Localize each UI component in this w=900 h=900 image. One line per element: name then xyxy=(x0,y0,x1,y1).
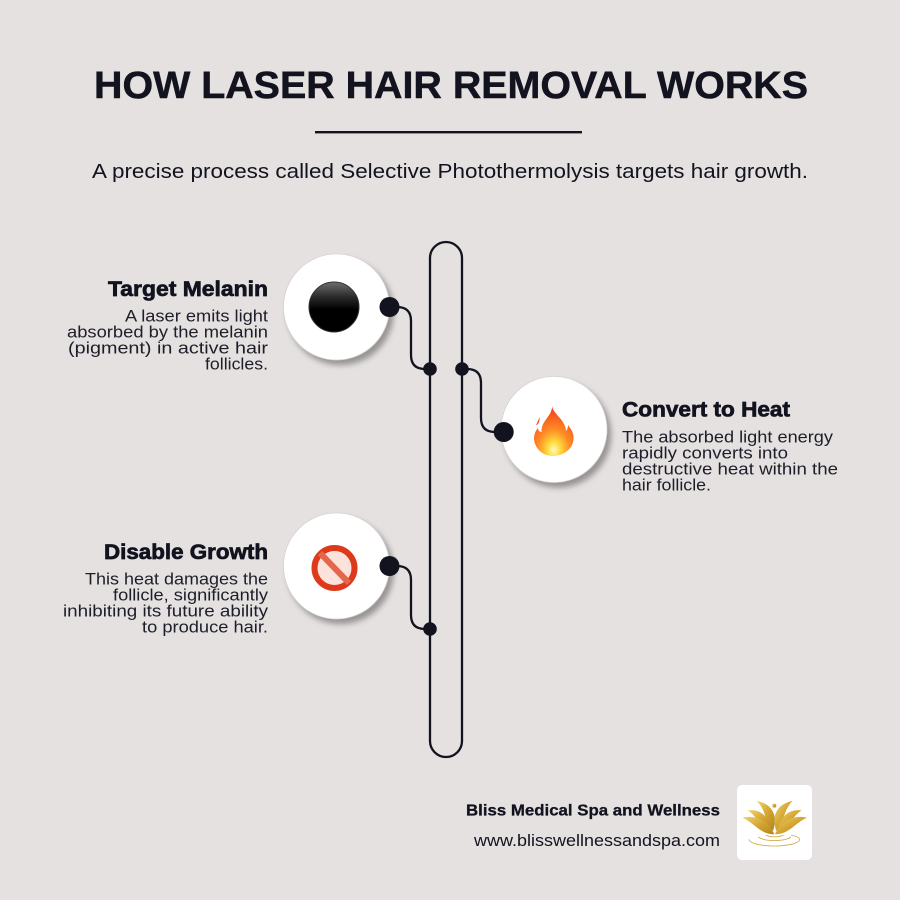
text: target melanin: follicles. xyxy=(205,355,268,374)
central track xyxy=(430,242,462,757)
title: HOW LASER HAIR REMOVAL WORKS xyxy=(94,65,808,107)
connector: target melanin xyxy=(390,307,437,376)
footer brand name: Bliss Medical Spa and Wellness xyxy=(466,802,720,820)
text: disable growth: follicle, significantly xyxy=(113,585,269,604)
step: convert to heat xyxy=(494,376,838,495)
heading: target melanin: Target Melanin xyxy=(108,278,268,301)
text: convert to heat: destructive heat within the xyxy=(622,460,838,479)
text: convert to heat: hair follicle. xyxy=(622,476,711,495)
text: target melanin: (pigment) in active hair xyxy=(68,339,268,358)
text: convert to heat xyxy=(622,428,838,495)
text: target melanin: absorbed by the melanin xyxy=(67,323,268,342)
subtitle: A precise process called Selective Photothermolysis targets hair growth. xyxy=(92,160,808,183)
text: disable growth: to produce hair. xyxy=(142,618,268,636)
logo: gold lotus xyxy=(737,785,812,860)
text: convert to heat: rapidly converts into xyxy=(622,444,788,463)
heading: convert to heat: Convert to Heat xyxy=(622,399,790,422)
text: target melanin: A laser emits light xyxy=(125,307,268,326)
text: disable growth: inhibiting its future ability xyxy=(63,601,269,620)
heading: disable growth: Disable Growth xyxy=(104,541,268,564)
icon circle: no entry sign xyxy=(284,513,400,619)
text: target melanin xyxy=(67,307,268,374)
icon circle: fire xyxy=(494,376,607,482)
connector: disable growth xyxy=(390,566,437,636)
text: disable growth: This heat damages the xyxy=(85,569,268,588)
text: convert to heat: The absorbed light energy xyxy=(622,428,834,447)
step: target melanin xyxy=(67,254,400,374)
connector: convert to heat xyxy=(455,362,504,432)
footer website: www.blisswellnessandspa.com xyxy=(473,832,720,850)
icon circle: black circle xyxy=(284,254,400,360)
text: disable growth xyxy=(63,569,269,636)
step: disable growth xyxy=(63,513,400,636)
